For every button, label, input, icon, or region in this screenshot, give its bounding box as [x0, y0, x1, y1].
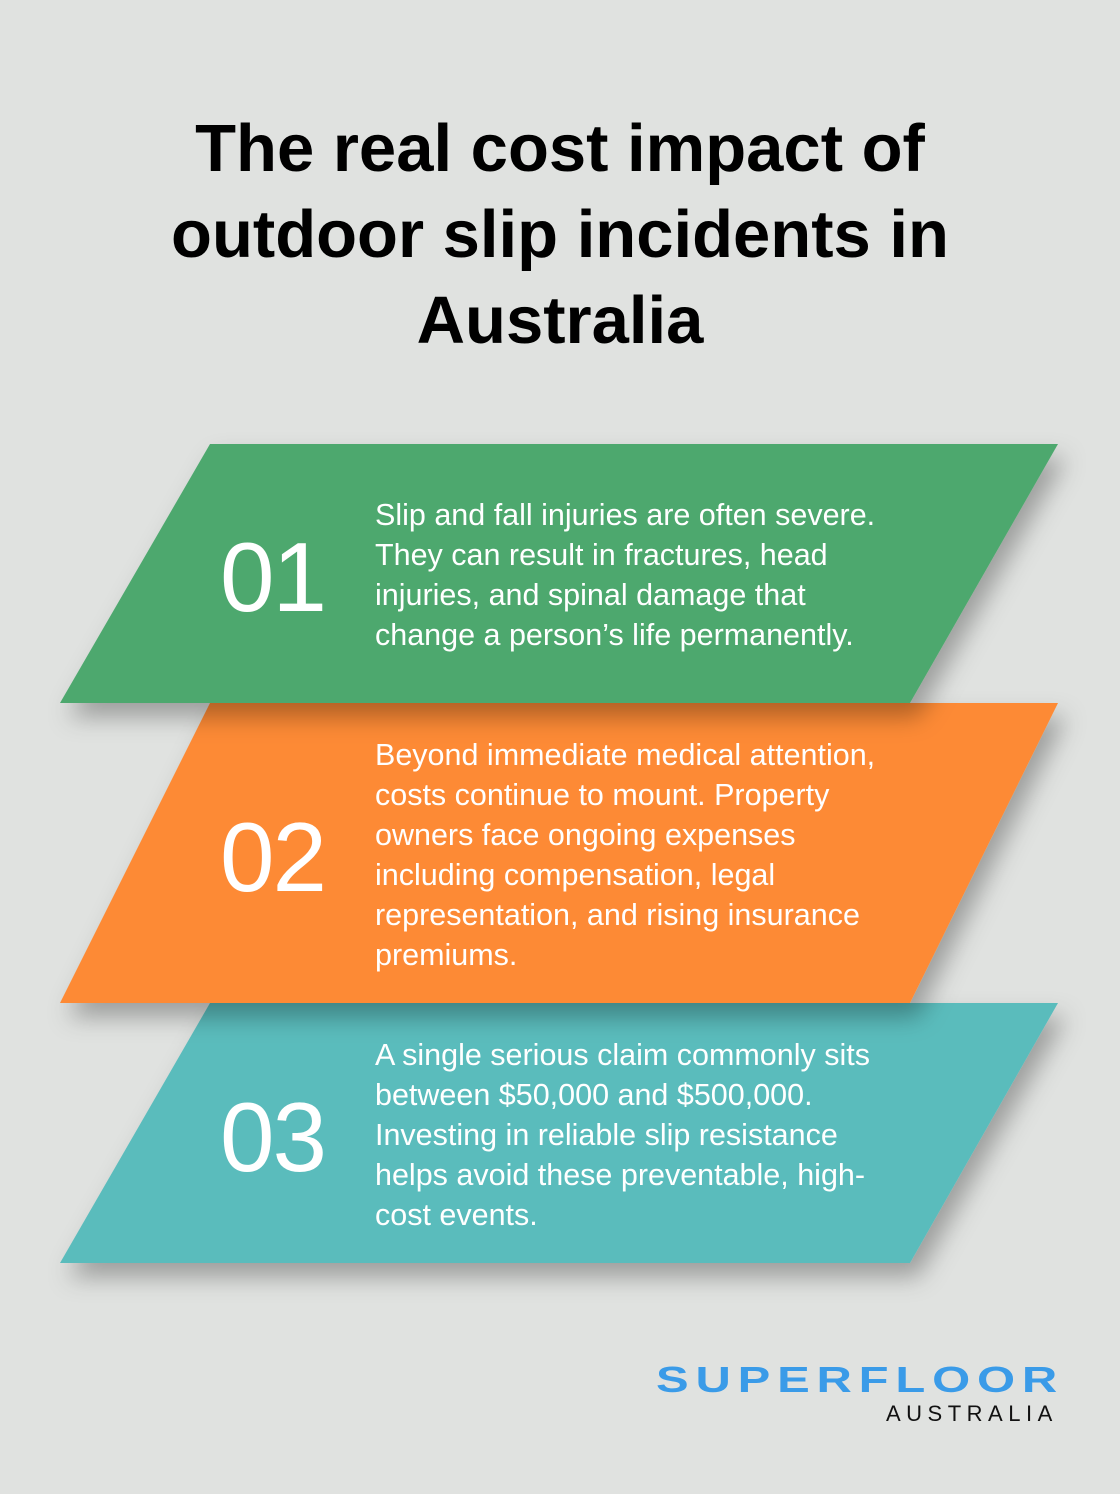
- text 02: representation, and rising insurance: [375, 898, 860, 932]
- title: outdoor slip incidents in: [171, 197, 949, 272]
- text 02: [375, 738, 875, 972]
- text 02: premiums.: [375, 938, 517, 972]
- text 01: [375, 498, 875, 652]
- text 02: including compensation, legal: [375, 858, 775, 892]
- text 02: owners face ongoing expenses: [375, 818, 796, 852]
- text 03: between $50,000 and $500,000.: [375, 1078, 813, 1112]
- number 01: 01: [220, 522, 325, 632]
- text 01: change a person’s life permanently.: [375, 618, 854, 652]
- title: The real cost impact of: [195, 111, 925, 186]
- text 02: Beyond immediate medical attention,: [375, 738, 875, 772]
- text 03: cost events.: [375, 1198, 538, 1232]
- text 03: A single serious claim commonly sits: [375, 1038, 870, 1072]
- text 01: injuries, and spinal damage that: [375, 578, 806, 612]
- text 01: Slip and fall injuries are often severe.: [375, 498, 875, 532]
- title: [171, 111, 949, 358]
- number 02: 02: [220, 802, 325, 912]
- logo: [656, 1359, 1064, 1426]
- text 02: costs continue to mount. Property: [375, 778, 829, 812]
- title: Australia: [417, 283, 703, 358]
- text 03: [375, 1038, 870, 1232]
- text 03: Investing in reliable slip resistance: [375, 1118, 838, 1152]
- band 3: [60, 1003, 1058, 1263]
- band 1: [60, 444, 1058, 703]
- text 03: helps avoid these preventable, high-: [375, 1158, 865, 1192]
- number 03: 03: [220, 1082, 325, 1192]
- logo: AUSTRALIA: [886, 1401, 1058, 1426]
- band 2: [60, 703, 1058, 1003]
- logo: SUPERFLOOR: [656, 1359, 1064, 1400]
- text 01: They can result in fractures, head: [375, 538, 828, 572]
